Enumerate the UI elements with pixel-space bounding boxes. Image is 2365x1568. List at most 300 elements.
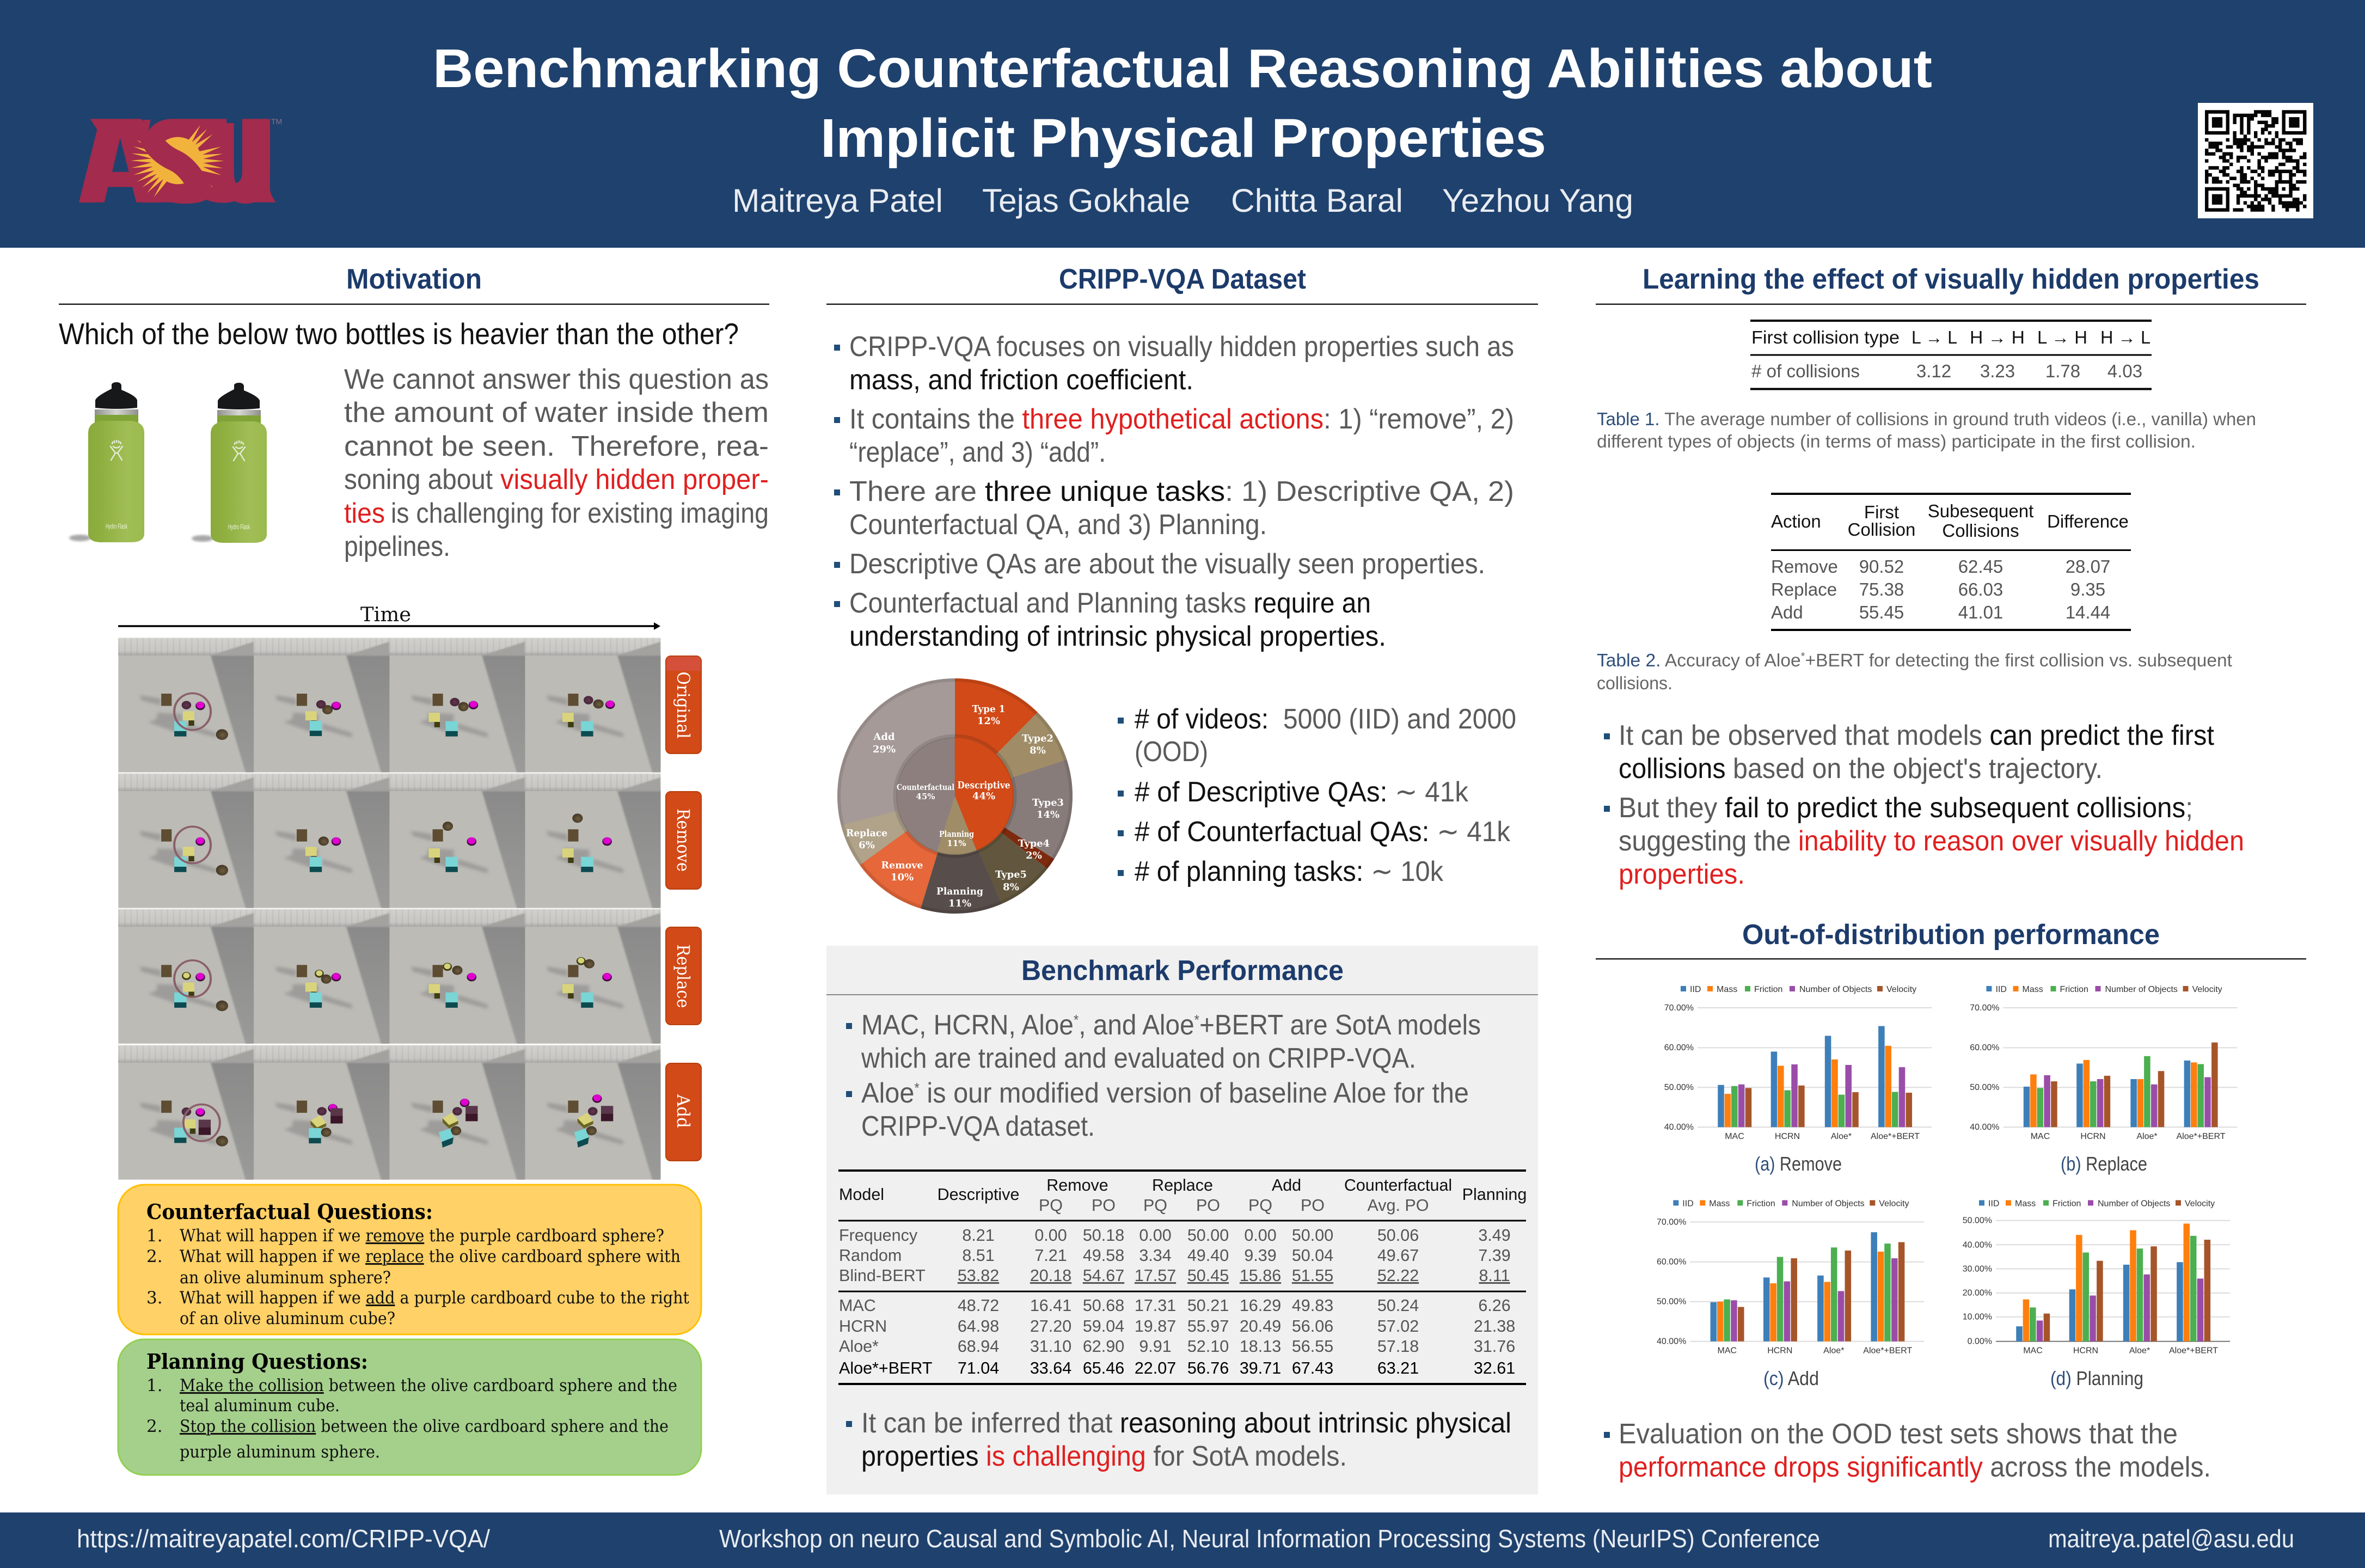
donut labels: Counterfactual <box>897 782 954 792</box>
table: model accuracy: 67.43 <box>1292 1359 1333 1377</box>
bullet text: findings: It can be observed that models can predict the first <box>1619 720 2215 751</box>
donut labels: 8% <box>1030 745 1046 756</box>
table: model accuracy: 7.21 <box>1034 1246 1067 1265</box>
chart: remove: Friction <box>1754 985 1782 994</box>
chart: replace: 40.00% <box>1970 1123 1999 1132</box>
table: model accuracy: PQ <box>1143 1196 1167 1215</box>
chart: replace: 60.00% <box>1970 1043 1999 1052</box>
donut labels: Type 1 <box>972 703 1005 715</box>
table: model accuracy: 21.38 <box>1474 1317 1515 1336</box>
callout: counterfactual questions: 1. <box>146 1226 163 1246</box>
bullet text: findings <box>1604 720 2244 890</box>
QR code <box>2198 103 2313 218</box>
table: model accuracy: Avg. PO <box>1367 1196 1429 1215</box>
authors: Tejas Gokhale <box>982 182 1190 219</box>
bullet text: models: CRIPP-VQA dataset. <box>861 1111 1095 1142</box>
title: Implicit Physical Properties <box>820 108 1546 169</box>
table 2: first vs subsequent collisions: Add <box>1771 602 1803 622</box>
caption: table 2 <box>1597 650 2232 693</box>
table 2: first vs subsequent collisions: Difference <box>2047 511 2129 531</box>
explanation text: We cannot answer this question as <box>344 364 769 395</box>
table 2: first vs subsequent collisions: 75.38 <box>1859 579 1904 599</box>
chart: replace: 50.00% <box>1970 1083 1999 1092</box>
table: model accuracy: 68.94 <box>958 1337 999 1356</box>
table: model accuracy: 50.24 <box>1377 1296 1419 1315</box>
caption: table 2: Table 2. Accuracy of Aloe <box>1597 650 1799 670</box>
logo: ASU: A <box>79 98 161 227</box>
heading: out-of-distribution performance: Out-of-distribution performance <box>1742 919 2160 951</box>
table 2: first vs subsequent collisions: 55.45 <box>1859 602 1904 622</box>
chart: planning: 30.00% <box>1963 1264 1992 1273</box>
table: model accuracy: MAC <box>839 1296 876 1315</box>
callout: counterfactual questions: What will happen if we remove the purple cardboard sphere? <box>180 1226 664 1246</box>
table: model accuracy: 49.83 <box>1292 1296 1333 1315</box>
logo: ASU: TM <box>271 117 282 126</box>
table: model accuracy: 39.71 <box>1240 1359 1281 1377</box>
table: model accuracy: 9.91 <box>1139 1337 1172 1356</box>
bullet text: models: +BERT are SotA models <box>1199 1009 1481 1041</box>
time axis arrow <box>118 604 660 630</box>
chart: add: MAC <box>1718 1346 1737 1355</box>
logo: ASU: U <box>218 98 275 227</box>
authors: Chitta Baral <box>1231 182 1403 219</box>
header band <box>0 0 2365 248</box>
table: model accuracy: Model <box>839 1185 884 1204</box>
bullet text: conclusion <box>846 1407 1511 1472</box>
row: replace <box>118 909 664 1046</box>
explanation text: cannot be seen. Therefore, rea- <box>344 431 769 462</box>
table 2: first vs subsequent collisions: Collision <box>1848 519 1915 540</box>
table: model accuracy: 3.49 <box>1478 1226 1511 1245</box>
donut labels: Descriptive <box>957 780 1010 791</box>
donut labels: Type3 <box>1032 797 1064 808</box>
table: model accuracy: 27.20 <box>1030 1317 1071 1336</box>
table: model accuracy: 0.00 <box>1034 1226 1067 1245</box>
chart: remove: Mass <box>1717 985 1737 994</box>
donut labels: 8% <box>1003 881 1019 893</box>
chart: planning: MAC <box>2023 1346 2043 1355</box>
callout: planning questions: Planning Questions: <box>146 1349 368 1374</box>
chart: add: 40.00% <box>1657 1337 1686 1346</box>
icon: left bottle <box>69 382 144 542</box>
bullet text: models: Aloe <box>861 1077 918 1109</box>
bullet text: models: * <box>1074 1012 1079 1028</box>
table: model accuracy: 71.04 <box>958 1359 999 1377</box>
table 1: collisions: 3.23 <box>1980 361 2015 381</box>
caption: planning: (d) Planning <box>2050 1367 2143 1389</box>
donut labels: 44% <box>972 791 995 802</box>
logo: ASU <box>79 98 282 227</box>
chart: add: IID <box>1682 1199 1694 1208</box>
tab: add: Add <box>673 1094 694 1128</box>
bullet text: models: is our modified version of baseline Aloe for the <box>920 1077 1469 1109</box>
donut labels: Type4 <box>1018 838 1050 849</box>
panel: CRIPP-VQA dataset <box>826 264 1538 912</box>
footer band <box>0 1512 2365 1568</box>
donut labels: Add <box>873 731 895 743</box>
table: model accuracy: 16.41 <box>1030 1296 1071 1315</box>
table: model accuracy: 17.57 <box>1135 1266 1176 1285</box>
table: model accuracy: 52.22 <box>1377 1266 1419 1285</box>
chart: remove: 40.00% <box>1664 1123 1694 1132</box>
chart: replace: Aloe*+BERT <box>2177 1132 2226 1141</box>
chart: planning: Friction <box>2052 1199 2081 1208</box>
chart: add: HCRN <box>1767 1346 1792 1355</box>
table 1: collisions <box>1750 320 2152 390</box>
chart: remove: 50.00% <box>1664 1083 1694 1092</box>
tab: remove <box>666 792 701 889</box>
logo: ASU: S <box>147 98 223 227</box>
callout: planning questions: teal aluminum cube. <box>180 1396 340 1416</box>
caption: table 1 <box>1597 409 2256 451</box>
table: model accuracy: 0.00 <box>1244 1226 1277 1245</box>
callout: counterfactual questions: of an olive aluminum cube? <box>180 1309 395 1328</box>
table: model accuracy: 3.34 <box>1139 1246 1172 1265</box>
table: model accuracy: 50.45 <box>1187 1266 1229 1285</box>
bullet text: models: * <box>914 1080 920 1096</box>
bullet text: OOD finding <box>1604 1418 2211 1483</box>
tab: replace: Replace <box>673 944 694 1008</box>
chart: remove: 60.00% <box>1664 1043 1694 1052</box>
table 1: collisions: H → H <box>1970 327 2025 347</box>
callout: planning questions: 2. <box>146 1417 163 1436</box>
donut labels <box>846 703 1064 909</box>
chart: replace: IID <box>1996 985 2007 994</box>
bullet text: findings: properties. <box>1619 859 1745 890</box>
table: model accuracy: 0.00 <box>1139 1226 1172 1245</box>
chart: replace: MAC <box>2031 1132 2050 1141</box>
chart: remove: Aloe*+BERT <box>1871 1132 1920 1141</box>
callout: planning questions: 1. <box>146 1376 163 1395</box>
table 2: first vs subsequent collisions: 9.35 <box>2070 579 2105 599</box>
donut labels: Type5 <box>995 869 1027 880</box>
table: model accuracy: 56.06 <box>1292 1317 1333 1336</box>
bullet text: findings: But they fail to predict the subsequent collisions; <box>1619 792 2193 824</box>
table: model accuracy: 50.06 <box>1377 1226 1419 1245</box>
table: model accuracy: 59.04 <box>1083 1317 1124 1336</box>
donut labels: Replace <box>846 828 887 839</box>
donut labels: 14% <box>1037 809 1059 820</box>
chart: remove: Velocity <box>1886 985 1916 994</box>
table 2: first vs subsequent collisions: Subesequent <box>1928 501 2033 521</box>
bullet text: models: , and Aloe <box>1079 1009 1194 1041</box>
tab: original: Original <box>673 672 694 738</box>
table: model accuracy: Random <box>839 1246 902 1265</box>
table: model accuracy: PO <box>1092 1196 1116 1215</box>
donut labels: 11% <box>948 898 971 909</box>
chart: add: Aloe*+BERT <box>1863 1346 1913 1355</box>
table: model accuracy: 56.76 <box>1187 1359 1229 1377</box>
bullet text: findings: suggesting the inability to reason over visually hidden <box>1619 825 2244 857</box>
table: model accuracy: 49.67 <box>1377 1246 1419 1265</box>
callout: counterfactual questions: What will happen if we replace the olive cardboard sphere with <box>180 1247 681 1266</box>
bullet list: dataset description: There are three unique tasks : 1) Descriptive QA, 2) <box>849 476 1514 507</box>
title <box>433 38 1932 169</box>
chart: replace: 70.00% <box>1970 1003 1999 1013</box>
title: Benchmarking Counterfactual Reasoning Abilities about <box>433 38 1932 99</box>
table 1: collisions: 4.03 <box>2107 361 2142 381</box>
table: model accuracy: HCRN <box>839 1317 887 1336</box>
chart: replace <box>1970 985 2238 1141</box>
row: add <box>118 1045 664 1183</box>
chart: planning: HCRN <box>2073 1346 2098 1355</box>
callout: counterfactual questions: 3. <box>146 1288 163 1308</box>
chart: planning: Aloe* <box>2129 1346 2150 1355</box>
table: model accuracy: 49.40 <box>1187 1246 1229 1265</box>
bullet list: dataset description: CRIPP-VQA focuses on visually hidden properties such as <box>849 331 1514 363</box>
table 2: first vs subsequent collisions: 41.01 <box>1958 602 2003 622</box>
table: model accuracy: 31.10 <box>1030 1337 1071 1356</box>
bullet list: dataset description: mass, and friction coefficient. <box>849 364 1193 396</box>
icon: right bottle: Hydro Flask <box>228 523 250 531</box>
table 2: first vs subsequent collisions: First <box>1864 502 1899 522</box>
table: model accuracy: 63.21 <box>1377 1359 1419 1377</box>
table: model accuracy: 22.07 <box>1135 1359 1176 1377</box>
chart: add: 60.00% <box>1657 1257 1686 1266</box>
explanation text: soning about <box>344 464 493 495</box>
table: model accuracy: PQ <box>1248 1196 1272 1215</box>
table: model accuracy: 50.04 <box>1292 1246 1333 1265</box>
table: model accuracy: Aloe*+BERT <box>839 1359 933 1377</box>
chart: add: Velocity <box>1879 1199 1909 1208</box>
chart: remove <box>1664 985 1932 1141</box>
chart: planning: IID <box>1988 1199 1999 1208</box>
callout: planning questions <box>118 1339 701 1475</box>
chart: replace: Number of Objects <box>2105 985 2178 994</box>
table: model accuracy: 50.18 <box>1083 1226 1124 1245</box>
stats list: (OOD) <box>1135 736 1208 768</box>
table: model accuracy: Aloe* <box>839 1337 879 1356</box>
bullet text: conclusion: It can be inferred that reasoning about intrinsic physical <box>861 1407 1511 1439</box>
heading: benchmark performance: Benchmark Performance <box>1021 955 1344 987</box>
bullet text: findings: collisions based on the object's trajectory. <box>1619 753 2103 785</box>
chart: planning: 40.00% <box>1963 1240 1992 1250</box>
chart: planning: 20.00% <box>1963 1288 1992 1297</box>
explanation text: ties <box>344 498 385 529</box>
table: model accuracy: 51.55 <box>1292 1266 1333 1285</box>
table: model accuracy: 50.68 <box>1083 1296 1124 1315</box>
chart: add: 70.00% <box>1657 1217 1686 1227</box>
table: model accuracy: 65.46 <box>1083 1359 1124 1377</box>
donut labels: 29% <box>873 744 896 755</box>
chart: add: 50.00% <box>1657 1297 1686 1306</box>
panel: benchmark performance <box>826 946 1538 1494</box>
tab: add <box>666 1063 701 1161</box>
callout: planning questions: Stop the collision between the olive cardboard sphere and the <box>180 1417 669 1436</box>
bullet list: dataset description: It contains the three hypothetical actions: 1) “remove”, 2) <box>849 403 1514 435</box>
question text: Which of the below two bottles is heavier than the other? <box>59 317 739 351</box>
row: original <box>118 638 664 775</box>
bullet text: models: * <box>1194 1012 1199 1028</box>
table: model accuracy: 53.82 <box>958 1266 999 1285</box>
authors <box>732 182 1633 219</box>
chart: remove: IID <box>1690 985 1701 994</box>
donut labels: Remove <box>881 860 923 871</box>
tab: replace <box>666 927 701 1025</box>
donut labels: 2% <box>1026 850 1042 861</box>
inner ring segments <box>926 767 984 825</box>
table: model accuracy: 49.58 <box>1083 1246 1124 1265</box>
table: model accuracy: Blind-BERT <box>839 1266 926 1285</box>
chart: planning: 10.00% <box>1963 1312 1992 1321</box>
callout: counterfactual questions: Counterfactual Questions: <box>146 1199 433 1224</box>
bullet text: OOD finding: Evaluation on the OOD test sets shows that the <box>1619 1418 2178 1450</box>
table: model accuracy: 31.76 <box>1474 1337 1515 1356</box>
chart: remove: Number of Objects <box>1799 985 1872 994</box>
table: model accuracy: 50.00 <box>1292 1226 1333 1245</box>
table: model accuracy: 55.97 <box>1187 1317 1229 1336</box>
table 2: first vs subsequent collisions <box>1771 493 2131 631</box>
panel: motivation <box>59 264 769 1475</box>
explanation text <box>344 364 769 562</box>
chart: remove: HCRN <box>1775 1132 1800 1141</box>
bullet list: dataset description: “replace”, and 3) “add”. <box>849 437 1106 468</box>
caption: add: (c) Add <box>1763 1367 1819 1389</box>
donut labels: Planning <box>936 886 983 897</box>
callout: counterfactual questions: an olive aluminum sphere? <box>180 1268 391 1288</box>
authors: Maitreya Patel <box>732 182 943 219</box>
tab: original <box>666 656 701 754</box>
time axis arrow: Time <box>360 604 411 626</box>
table: model accuracy: 62.90 <box>1083 1337 1124 1356</box>
video frames grid <box>118 638 664 1183</box>
table 2: first vs subsequent collisions: 66.03 <box>1958 579 2003 599</box>
footer band: maitreya.patel@asu.edu <box>2048 1524 2294 1553</box>
table: model accuracy: Frequency <box>839 1226 918 1245</box>
donut labels: 6% <box>859 840 875 851</box>
table: model accuracy: 8.11 <box>1479 1266 1510 1285</box>
table 1: collisions: L → L <box>1911 327 1957 347</box>
table: model accuracy: 15.86 <box>1240 1266 1281 1285</box>
table 1: collisions: H → L <box>2100 327 2150 347</box>
stats list: # of Counterfactual QAs: ∼ 41k <box>1135 816 1511 848</box>
explanation text: is challenging for existing imaging <box>391 498 769 529</box>
table: model accuracy: 20.49 <box>1240 1317 1281 1336</box>
chart: replace: Velocity <box>2192 985 2222 994</box>
footer band: Workshop on neuro Causal and Symbolic AI, Neural Information Processing Systems (NeurIPS) Conference <box>719 1524 1820 1553</box>
table 2: first vs subsequent collisions: Remove <box>1771 556 1838 577</box>
bullet text: models <box>846 1009 1481 1142</box>
icon: left bottle: Hydro Flask <box>106 522 127 530</box>
table: model accuracy: 8.51 <box>962 1246 995 1265</box>
chart: replace: HCRN <box>2080 1132 2106 1141</box>
bullet text: models: which are trained and evaluated on CRIPP-VQA. <box>861 1043 1416 1074</box>
callout: planning questions: purple aluminum sphere. <box>180 1442 380 1462</box>
chart: replace: Friction <box>2060 985 2088 994</box>
chart: add <box>1657 1199 1924 1355</box>
chart: add: Mass <box>1709 1199 1730 1208</box>
table 1: collisions: # of collisions <box>1751 361 1860 381</box>
table 1: collisions: L → H <box>2037 327 2087 347</box>
table: model accuracy: Remove <box>1046 1176 1108 1195</box>
table: model accuracy: 50.21 <box>1187 1296 1229 1315</box>
chart: planning: 0.00% <box>1968 1337 1992 1346</box>
table: model accuracy: 33.64 <box>1030 1359 1071 1377</box>
authors: Yezhou Yang <box>1442 182 1633 219</box>
caption: table 2: +BERT for detecting the first collision vs. subsequent <box>1805 650 2232 670</box>
bullet list: dataset description: understanding of intrinsic physical properties. <box>849 621 1386 652</box>
table: model accuracy: 54.67 <box>1083 1266 1124 1285</box>
table: model accuracy: 7.39 <box>1478 1246 1511 1265</box>
chart: planning: Velocity <box>2185 1199 2215 1208</box>
table 2: first vs subsequent collisions: 14.44 <box>2066 602 2110 622</box>
table: model accuracy: Planning <box>1462 1185 1527 1204</box>
table 2: first vs subsequent collisions: 90.52 <box>1859 556 1904 577</box>
donut labels: 45% <box>916 792 935 801</box>
table 1: collisions: 1.78 <box>2045 361 2080 381</box>
bullet text: models: MAC, HCRN, Aloe <box>861 1009 1093 1041</box>
caption: replace: (b) Replace <box>2061 1153 2147 1175</box>
explanation text: visually hidden proper- <box>500 464 769 495</box>
explanation text: the amount of water inside them <box>344 397 769 428</box>
caption: table 2: collisions. <box>1597 673 1672 693</box>
caption: table 1: different types of objects (in terms of mass) participate in the first collision. <box>1597 431 2196 451</box>
table: model accuracy: 52.10 <box>1187 1337 1229 1356</box>
chart: planning: 50.00% <box>1963 1216 1992 1225</box>
table 2: first vs subsequent collisions: 62.45 <box>1958 556 2003 577</box>
table: model accuracy: 17.31 <box>1135 1296 1176 1315</box>
bullet text: conclusion: properties is challenging for SotA models. <box>861 1441 1347 1472</box>
panel: visually hidden properties <box>1596 264 2306 1483</box>
chart: add: Aloe* <box>1823 1346 1844 1355</box>
donut labels: 12% <box>977 715 1000 727</box>
table: model accuracy: 48.72 <box>958 1296 999 1315</box>
caption: table 2: * <box>1801 651 1805 663</box>
tab: remove: Remove <box>673 808 694 872</box>
chart: remove: MAC <box>1725 1132 1744 1141</box>
donut labels: 11% <box>947 838 966 848</box>
heading: motivation: Motivation <box>346 264 482 295</box>
chart: replace: Mass <box>2022 985 2043 994</box>
table: model accuracy <box>838 1169 1527 1385</box>
table: model accuracy: 6.26 <box>1478 1296 1511 1315</box>
stats list: # of Descriptive QAs: ∼ 41k <box>1135 776 1469 808</box>
footer band: https://maitreyapatel.com/CRIPP-VQA/ <box>77 1524 490 1553</box>
caption: table 1: Table 1. The average number of collisions in ground truth videos (i.e., vanilla) when <box>1597 409 2256 429</box>
table: model accuracy: 19.87 <box>1135 1317 1176 1336</box>
donut labels: Planning <box>939 829 974 839</box>
callout: counterfactual questions <box>118 1185 701 1334</box>
chart: planning <box>1963 1199 2230 1355</box>
table: model accuracy: Replace <box>1152 1176 1213 1195</box>
table: model accuracy: PO <box>1196 1196 1220 1215</box>
chart: add: Friction <box>1747 1199 1775 1208</box>
table: model accuracy: 9.39 <box>1244 1246 1277 1265</box>
table: model accuracy: 18.13 <box>1240 1337 1281 1356</box>
table 2: first vs subsequent collisions: Action <box>1771 511 1821 531</box>
chart: planning: Number of Objects <box>2098 1199 2170 1208</box>
donut labels: 10% <box>891 872 914 883</box>
bullet list: dataset description: Counterfactual QA, and 3) Planning. <box>849 509 1267 541</box>
heading: CRIPP-VQA dataset: CRIPP-VQA Dataset <box>1059 264 1306 295</box>
table 1: collisions: First collision type <box>1751 327 1900 347</box>
bullet list: dataset description: Counterfactual and Planning tasks require an <box>849 587 1371 619</box>
chart: replace: Aloe* <box>2136 1132 2158 1141</box>
table: model accuracy: 64.98 <box>958 1317 999 1336</box>
table 2: first vs subsequent collisions: 28.07 <box>2066 556 2110 577</box>
stats list: # of videos: 5000 (IID) and 2000 <box>1135 703 1516 735</box>
chart: add: Number of Objects <box>1792 1199 1865 1208</box>
donut labels: Type2 <box>1022 733 1053 744</box>
caption: remove: (a) Remove <box>1755 1153 1842 1175</box>
bullet list: dataset description <box>834 331 1514 652</box>
chart: remove: Aloe* <box>1831 1132 1852 1141</box>
callout: planning questions: Make the collision between the olive cardboard sphere and the <box>180 1376 677 1395</box>
table: model accuracy: 50.00 <box>1187 1226 1229 1245</box>
table: model accuracy: 16.29 <box>1240 1296 1281 1315</box>
chart: planning: Mass <box>2015 1199 2036 1208</box>
table: model accuracy: Add <box>1272 1176 1301 1195</box>
